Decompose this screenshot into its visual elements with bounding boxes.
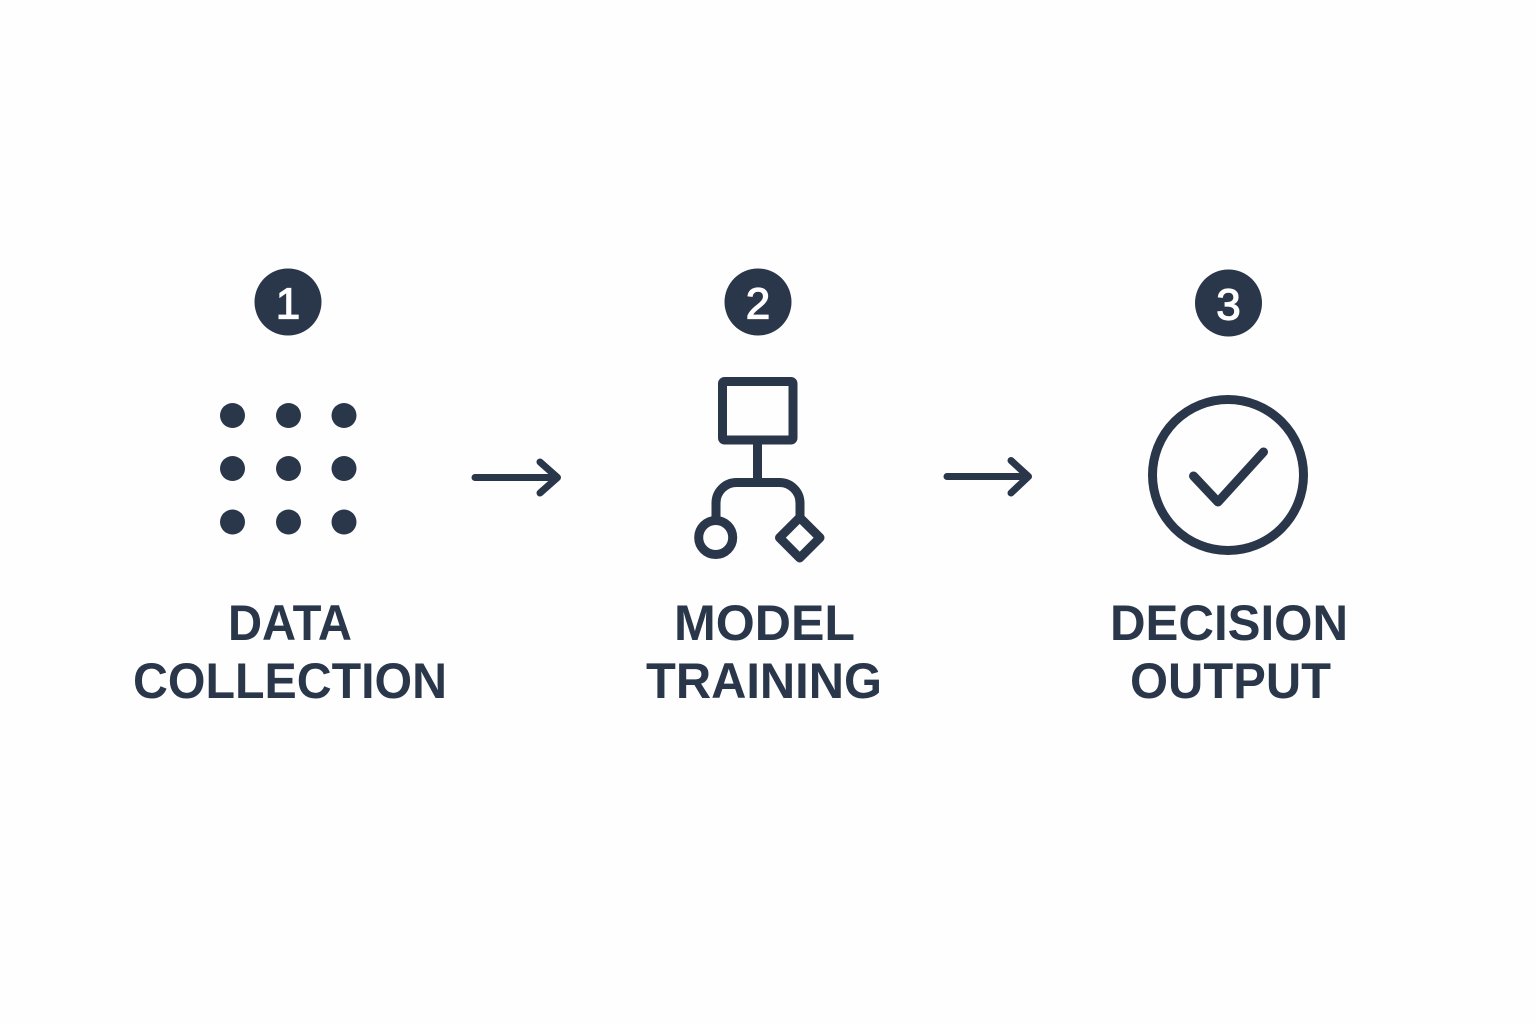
number badge 2: 2 xyxy=(746,280,770,328)
arrow: step 2 to step 3 xyxy=(947,460,1028,493)
arrow: step 1 to step 2 xyxy=(475,462,558,493)
label: data collection xyxy=(133,595,447,709)
number badge 3 xyxy=(1195,270,1262,336)
label: decision output xyxy=(1110,595,1348,709)
number badge 1 xyxy=(254,268,322,336)
step 3: decision output xyxy=(1110,270,1348,709)
label: data collection: COLLECTION xyxy=(133,653,447,709)
icon: decision tree xyxy=(699,382,820,558)
label: model training xyxy=(646,595,882,709)
number badge 3: 3 xyxy=(1216,280,1241,330)
number badge 2 xyxy=(724,268,792,336)
label: decision output: DECISION xyxy=(1110,595,1348,651)
icon: dot grid xyxy=(220,403,356,534)
icon: check mark in circle xyxy=(1152,400,1304,550)
label: data collection: DATA xyxy=(228,595,352,651)
label: decision output: OUTPUT xyxy=(1130,653,1331,709)
number badge 1: 1 xyxy=(276,280,300,328)
label: model training: TRAINING xyxy=(646,653,882,709)
step 2: model training xyxy=(646,268,882,709)
label: model training: MODEL xyxy=(674,595,855,651)
step 1: data collection xyxy=(133,268,447,709)
